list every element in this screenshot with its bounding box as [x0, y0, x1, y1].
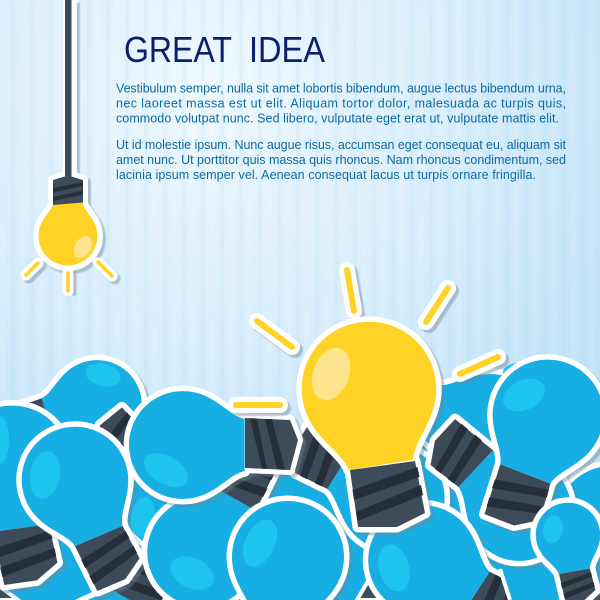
blue bulb: horizontal, cap pointing right — [129, 391, 298, 499]
blue bulb: far left — [0, 398, 86, 590]
back blue bulb: centre left, cap pointing up — [68, 390, 239, 569]
back blue bulb: behind yellow, cap visible at left — [271, 397, 464, 570]
blue bulb: bottom right of centre — [347, 484, 548, 600]
title: IDEA — [249, 29, 325, 70]
back blue bulb: top left — [0, 350, 152, 474]
text block: first paragraph: Vestibulum semper, nulla sit amet lobortis bibendum, augue lectus bibendum urna, — [116, 82, 566, 96]
small blue bulb: bottom right — [531, 498, 600, 600]
title: GREAT — [124, 29, 232, 70]
back blue bulb: bottom left cap — [25, 529, 204, 600]
text block: second paragraph: Ut id molestie ipsum. Nunc augue risus, accumsan eget consequat eu, aliquam sit — [116, 138, 567, 152]
blue bulb: right centre, cap pointing up left — [405, 397, 592, 582]
text block: second paragraph: lacinia ipsum semper vel. Aenean consequat lacus ut turpis ornare fringilla. — [116, 168, 536, 182]
text block: first paragraph: commodo volutpat nunc. Sed libero, vulputate eget erat ut, vulputate mattis elit. — [116, 112, 559, 126]
bottom left cap fragment — [0, 583, 18, 600]
back blue bulb: far right — [519, 450, 600, 600]
blue bulb: right front — [455, 344, 600, 542]
big yellow bulb — [292, 312, 447, 527]
blue bulb: lower centre, cap pointing up right — [128, 426, 306, 600]
blue bulb fragment: bottom right filler — [499, 568, 580, 600]
blue base behind the pile — [0, 440, 600, 600]
blue bulb: bottom centre — [216, 494, 351, 600]
bottom cap fragment — [357, 581, 381, 600]
text block: second paragraph: amet nunc. Ut porttitor quis massa quis rhoncus. Nam rhoncus condimentum, sed — [116, 153, 566, 167]
text block: second paragraph — [116, 138, 567, 182]
big bulb rays — [236, 270, 498, 405]
title — [124, 29, 325, 70]
text block: first paragraph — [116, 82, 566, 126]
text block: first paragraph: nec laoreet massa est ut elit. Aliquam tortor dolor, malesuada ac turpis quis, — [116, 96, 566, 110]
back blue bulb: right, behind yellow — [362, 342, 560, 500]
blue bulb: left front — [5, 410, 167, 600]
small bulb rays — [26, 262, 112, 291]
hanging small yellow bulb with cord — [39, 0, 97, 265]
